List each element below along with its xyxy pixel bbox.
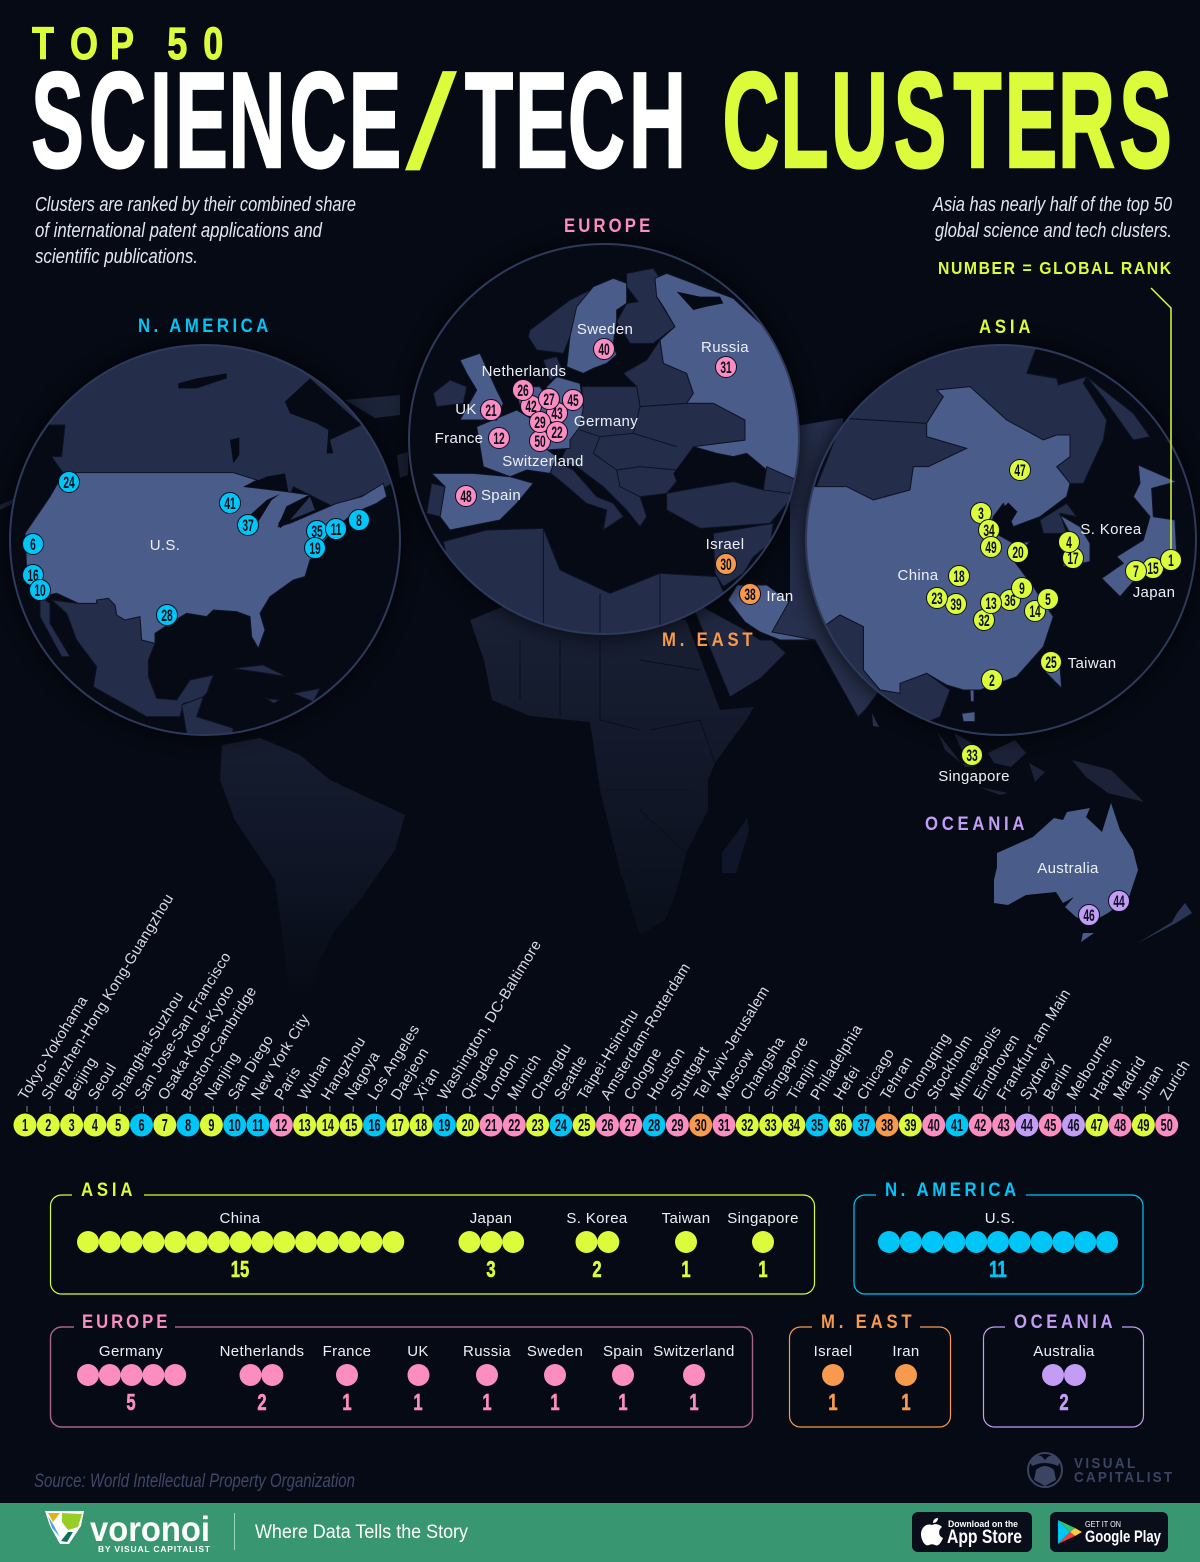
ranked list of clusters: Shenzhen-Hong Kong-Guangzhou	[38, 891, 177, 1103]
markers: Asia: 7	[1133, 563, 1139, 581]
ranked list of clusters: Seoul	[85, 1060, 120, 1103]
ranked list of clusters: Jinan	[1133, 1062, 1167, 1103]
ranked list of clusters: Wuhan	[295, 1053, 334, 1103]
ranked list of clusters: 9	[208, 1117, 214, 1136]
panel: Europe summary: France	[323, 1343, 371, 1360]
ranked list of clusters: 28	[648, 1117, 660, 1136]
ranked list of clusters: 31	[718, 1117, 730, 1136]
ranked list of clusters: Chicago	[854, 1045, 898, 1103]
panel: Asia summary	[50, 1179, 814, 1294]
panel: Middle East summary: 1	[901, 1390, 911, 1416]
ranked list of clusters: Daejeon	[388, 1045, 433, 1103]
country labels: UK	[455, 401, 477, 418]
markers: Europe and Middle East: 21	[485, 402, 497, 420]
ranked list of clusters: 37	[858, 1117, 870, 1136]
ranked list of clusters: Hangzhou	[318, 1034, 369, 1103]
ranked list of clusters: 3	[69, 1117, 75, 1136]
markers: North America: 24	[63, 474, 75, 492]
ranked list of clusters: Chongqing	[900, 1030, 954, 1103]
ranked list of clusters: Los Angeles	[364, 1022, 423, 1103]
markers: North America: 6	[30, 536, 36, 554]
panel: Oceania summary: OCEANIA	[1014, 1311, 1113, 1332]
ranked list of clusters: 41	[951, 1117, 963, 1136]
ranked list of clusters: Qingdao	[458, 1044, 503, 1103]
markers: North America: 8	[356, 512, 362, 530]
ranked list of clusters: 8	[185, 1117, 191, 1136]
country labels: China	[898, 567, 939, 584]
markers: Europe and Middle East: 48	[460, 488, 472, 506]
ranked list of clusters: San Diego	[225, 1032, 277, 1103]
markers: Europe and Middle East: 43	[551, 405, 563, 423]
panel: North America summary	[854, 1179, 1143, 1294]
panel: Asia summary: China	[220, 1210, 261, 1227]
ranked list of clusters: 26	[601, 1117, 614, 1136]
panel: Oceania summary: Australia	[1033, 1343, 1095, 1360]
Google Play button	[1050, 1512, 1168, 1552]
markers: Europe and Middle East: 29	[534, 414, 546, 432]
footer band	[0, 1503, 1200, 1562]
logo: Visual Capitalist: CAPITALIST	[1074, 1469, 1172, 1486]
panel: Middle East summary	[790, 1311, 950, 1427]
ranked list of clusters: 16	[368, 1117, 381, 1136]
ranked list of clusters: 27	[625, 1117, 637, 1136]
markers: Asia: 32	[978, 612, 990, 630]
ranked list of clusters: 17	[392, 1117, 404, 1136]
markers: North America: 19	[309, 540, 321, 558]
panel: Europe summary: 1	[342, 1390, 352, 1416]
country labels: Taiwan	[1068, 655, 1116, 672]
panel: Middle East summary: M. EAST	[821, 1311, 912, 1332]
markers: Europe and Middle East	[456, 338, 760, 604]
markers: Europe and Middle East: 50	[534, 433, 546, 451]
region heading: North America: N. AMERICA	[138, 315, 268, 336]
Australia	[994, 803, 1138, 923]
panel: Europe summary: 2	[257, 1390, 267, 1416]
ranked list of clusters: Melbourne	[1063, 1031, 1116, 1103]
ranked list of clusters: Nanjing	[201, 1049, 243, 1103]
country labels: Israel	[706, 536, 744, 553]
intro text: of international patent applications and	[35, 220, 323, 242]
ranked list of clusters: 46	[1067, 1117, 1080, 1136]
ranked list of clusters: 21	[485, 1117, 497, 1136]
region heading: Asia: ASIA	[979, 316, 1031, 337]
ranked list of clusters: 13	[299, 1117, 311, 1136]
ranked list of clusters: 34	[788, 1117, 801, 1136]
panel: Europe summary: Spain	[603, 1343, 643, 1360]
markers: North America: 35	[311, 523, 323, 541]
ranked list of clusters: 11	[252, 1117, 264, 1136]
panel: Middle East summary: 1	[828, 1390, 838, 1416]
markers: Asia	[926, 460, 1182, 766]
panel: North America summary: U.S.	[985, 1210, 1015, 1227]
ranked list of clusters: Eindhoven	[970, 1031, 1023, 1103]
panel: Europe summary: 1	[689, 1390, 699, 1416]
ranked list of clusters: Changsha	[737, 1034, 789, 1103]
ranked list of clusters: Stuttgart	[667, 1043, 713, 1103]
markers: Asia: 17	[1067, 550, 1079, 568]
logo: Voronoi: BY VISUAL CAPITALIST	[98, 1544, 211, 1554]
ranked list of clusters: 14	[322, 1117, 335, 1136]
logo: Voronoi: voronoi	[90, 1510, 210, 1549]
markers: Oceania: 44	[1113, 893, 1125, 911]
ranked list of clusters: 10	[229, 1117, 241, 1136]
asia note text	[932, 194, 1172, 242]
ranked list of clusters: Berlin	[1040, 1060, 1076, 1103]
markers: Europe and Middle East: 27	[543, 391, 555, 409]
markers: Europe and Middle East: 30	[720, 556, 732, 574]
ranked list of clusters: 22	[508, 1117, 520, 1136]
markers: Oceania	[1078, 890, 1130, 926]
panel: Europe summary: 1	[482, 1390, 492, 1416]
ranked list of clusters: 29	[671, 1117, 683, 1136]
markers: Europe and Middle East: 42	[525, 398, 537, 416]
logo: Visual Capitalist: VISUAL	[1074, 1455, 1135, 1472]
intro text	[35, 194, 356, 268]
markers: North America: 10	[34, 582, 46, 600]
ranked list of clusters: 45	[1044, 1117, 1056, 1136]
ranked list of clusters: 33	[765, 1117, 777, 1136]
ranked list of clusters: Boston-Cambridge	[178, 983, 260, 1103]
ranked list of clusters: Tehran	[877, 1054, 916, 1103]
markers: North America: 37	[242, 517, 254, 535]
logo: Voronoi	[45, 1510, 211, 1554]
arrow: rank pointer	[1151, 288, 1171, 552]
ranked list of clusters: 12	[275, 1117, 287, 1136]
logo: Visual Capitalist	[1028, 1453, 1172, 1487]
markers: Asia: 2	[989, 672, 995, 690]
country labels: Spain	[481, 487, 521, 504]
intro text: scientific publications.	[35, 246, 198, 268]
panel: Europe globe	[404, 239, 804, 640]
ranked list of clusters: 2	[45, 1117, 51, 1136]
panel: Asia summary: S. Korea	[566, 1210, 628, 1227]
panel: Asia summary: 15	[231, 1257, 249, 1283]
ranked list of clusters: Osaka-Kobe-Kyoto	[155, 982, 238, 1103]
markers: Asia: 36	[1004, 592, 1016, 610]
panel: Europe summary: Netherlands	[220, 1343, 304, 1360]
ranked list of clusters	[14, 891, 1194, 1136]
panel: Asia summary: 2	[592, 1257, 602, 1283]
ranked list of clusters: Paris	[271, 1064, 304, 1103]
panel: Europe summary	[50, 1311, 752, 1427]
ranked list of clusters: 5	[115, 1117, 121, 1136]
ranked list of clusters: 30	[695, 1117, 707, 1136]
ranked list of clusters: Zurich	[1157, 1057, 1194, 1103]
ranked list of clusters: 44	[1021, 1117, 1034, 1136]
ranked list of clusters: 43	[998, 1117, 1010, 1136]
ranked list of clusters: Washington, DC-Baltimore	[434, 937, 545, 1103]
markers: Asia: 23	[931, 590, 943, 608]
markers: Asia: 20	[1012, 544, 1024, 562]
ranked list of clusters: 18	[415, 1117, 427, 1136]
ranked list of clusters: Cologne	[621, 1045, 666, 1103]
panel: Europe summary: 1	[413, 1390, 423, 1416]
title: science/tech clusters: CLUSTERS	[723, 43, 1172, 196]
panel: Europe summary: 1	[618, 1390, 628, 1416]
country labels: Sweden	[577, 321, 633, 338]
markers: Oceania: 46	[1083, 907, 1095, 925]
country labels: Netherlands	[482, 363, 566, 380]
ranked list of clusters: 19	[438, 1117, 450, 1136]
ranked list of clusters: 15	[345, 1117, 357, 1136]
panel: Asia summary: 1	[681, 1257, 691, 1283]
ranked list of clusters: San Jose-San Francisco	[131, 949, 235, 1103]
App Store button: App Store	[947, 1527, 1022, 1548]
ranked list of clusters: Harbin	[1087, 1055, 1125, 1103]
ranked list of clusters: Minneapolis	[947, 1023, 1005, 1103]
panel: Asia summary: Japan	[470, 1210, 512, 1227]
ranked list of clusters: Amsterdam-Rotterdam	[597, 960, 694, 1103]
markers: Europe and Middle East: 31	[720, 359, 732, 377]
markers: Asia: 49	[985, 539, 997, 557]
markers: Asia: 39	[950, 596, 962, 614]
markers: North America: 28	[161, 607, 173, 625]
App Store button	[912, 1512, 1032, 1552]
ranked list of clusters: 32	[741, 1117, 753, 1136]
ranked list of clusters: Tel Aviv-Jerusalem	[691, 983, 773, 1103]
Google Play button: Google Play	[1085, 1527, 1161, 1546]
ranked list of clusters: 36	[834, 1117, 847, 1136]
panel: Asia globe	[800, 340, 1200, 740]
ranked list of clusters: 47	[1091, 1117, 1103, 1136]
title: science/tech clusters: TECH	[465, 43, 686, 196]
markers: Asia: 3	[978, 505, 984, 523]
title: science/tech clusters: SCIENCE	[31, 43, 401, 196]
ranked list of clusters: Stockholm	[924, 1032, 976, 1103]
panel: Europe summary: Switzerland	[653, 1343, 735, 1360]
title: science/tech clusters	[31, 43, 1172, 198]
ranked list of clusters: 23	[532, 1117, 544, 1136]
ranked list of clusters: 42	[974, 1117, 986, 1136]
country labels: Singapore	[938, 768, 1010, 785]
panel: Oceania summary: 2	[1059, 1390, 1069, 1416]
ranked list of clusters: Tokyo-Yokohama	[15, 993, 92, 1103]
ranked list of clusters: London	[481, 1050, 523, 1103]
markers: Asia: 4	[1066, 534, 1072, 552]
markers: North America	[22, 472, 370, 626]
markers: North America: 41	[224, 495, 236, 513]
ranked list of clusters: 4	[92, 1117, 99, 1136]
ranked list of clusters: Tianjin	[784, 1055, 822, 1103]
intro text: Clusters are ranked by their combined share	[35, 194, 356, 216]
ranked list of clusters: 35	[811, 1117, 823, 1136]
country labels: Australia	[1037, 860, 1099, 877]
world map background	[0, 395, 1192, 1000]
ranked list of clusters: Houston	[644, 1045, 689, 1103]
panel: Asia summary: Taiwan	[662, 1210, 710, 1227]
markers: Asia: 9	[1019, 580, 1025, 598]
country labels: S. Korea	[1080, 521, 1142, 538]
ranked list of clusters: Moscow	[714, 1046, 758, 1103]
markers: Asia: 14	[1029, 603, 1041, 621]
panel: North America globe	[0, 340, 420, 740]
country labels: Switzerland	[502, 453, 584, 470]
panel: Middle East summary: Israel	[814, 1343, 852, 1360]
panel: Middle East summary: Iran	[892, 1343, 920, 1360]
markers: Europe and Middle East: 26	[517, 382, 529, 400]
ranked list of clusters: Singapore	[761, 1034, 812, 1103]
markers: Asia: 34	[983, 522, 995, 540]
ranked list of clusters: 24	[555, 1117, 568, 1136]
ranked list of clusters: 7	[162, 1117, 168, 1136]
ranked list of clusters: 50	[1161, 1117, 1173, 1136]
panel: Europe summary: UK	[407, 1343, 429, 1360]
ranked list of clusters: Sydney	[1017, 1050, 1058, 1103]
legend: number = global rank: NUMBER = GLOBAL RANK	[938, 258, 1171, 278]
panel: Europe summary: EUROPE	[82, 1311, 167, 1332]
ranked list of clusters: Seattle	[551, 1053, 591, 1103]
panel: Europe summary: Russia	[463, 1343, 511, 1360]
ranked list of clusters: Shanghai-Suzhou	[108, 989, 187, 1103]
panel: Europe summary: 1	[550, 1390, 560, 1416]
panel: Asia summary: 1	[758, 1257, 768, 1283]
markers: Europe and Middle East: 40	[598, 341, 610, 359]
title: top 50: TOP 50	[32, 18, 223, 69]
panel: Europe summary: 5	[126, 1390, 136, 1416]
panel: North America summary: N. AMERICA	[885, 1179, 1016, 1200]
ranked list of clusters: 20	[462, 1117, 474, 1136]
panel: North America summary: 11	[989, 1257, 1007, 1283]
ranked list of clusters: Taipei-Hsinchu	[574, 1007, 642, 1103]
panel: Oceania summary	[984, 1311, 1144, 1427]
ranked list of clusters: 40	[928, 1117, 940, 1136]
ranked list of clusters: 25	[578, 1117, 590, 1136]
ranked list of clusters: Philadelphia	[807, 1021, 866, 1103]
panel: Europe summary: Germany	[99, 1343, 163, 1360]
ranked list of clusters: Xi'an	[411, 1065, 443, 1103]
markers: Europe and Middle East: 38	[744, 586, 756, 604]
markers: Asia: 15	[1147, 560, 1159, 578]
ranked list of clusters: Hefei	[830, 1063, 864, 1103]
country labels	[150, 321, 1175, 877]
ranked list of clusters: Nagoya	[341, 1048, 384, 1103]
country labels: Iran	[766, 588, 794, 605]
ranked list of clusters: Frankfurt am Main	[994, 986, 1074, 1103]
ranked list of clusters: Chengdu	[528, 1040, 575, 1103]
ranked list of clusters: 39	[904, 1117, 916, 1136]
Google Play button: GET IT ON	[1085, 1520, 1121, 1529]
markers: Asia: 5	[1045, 591, 1051, 609]
markers: North America: 16	[27, 567, 39, 585]
markers: Asia: 1	[1168, 552, 1174, 570]
source: Source: World Intellectual Property Organization	[34, 1471, 355, 1492]
markers: Europe and Middle East: 22	[551, 424, 563, 442]
markers: Asia: 25	[1045, 654, 1057, 672]
markers: Europe and Middle East: 45	[567, 392, 579, 410]
ranked list of clusters: Madrid	[1110, 1054, 1149, 1103]
ranked list of clusters: New York City	[248, 1011, 313, 1103]
tagline: Where Data Tells the Story	[255, 1522, 468, 1543]
ranked list of clusters: 1	[22, 1117, 28, 1136]
ranked list of clusters: 38	[881, 1117, 893, 1136]
panel: Asia summary: ASIA	[81, 1179, 133, 1200]
region heading: Oceania: OCEANIA	[925, 813, 1025, 834]
markers: Asia: 33	[966, 747, 978, 765]
ranked list of clusters: 49	[1137, 1117, 1149, 1136]
panel: Asia summary: Singapore	[727, 1210, 799, 1227]
ranked list of clusters: Munich	[504, 1051, 545, 1103]
markers: Asia: 47	[1014, 462, 1026, 480]
ranked list of clusters: 6	[138, 1117, 145, 1136]
region heading: Middle East: M. EAST	[662, 629, 753, 650]
App Store button: Download on the	[948, 1519, 1018, 1529]
panel: Europe summary: Sweden	[527, 1343, 583, 1360]
country labels: U.S.	[150, 537, 180, 554]
country labels: Russia	[701, 339, 749, 356]
markers: Europe and Middle East: 12	[493, 430, 505, 448]
panel: Asia summary: 3	[486, 1257, 496, 1283]
markers: North America: 11	[331, 521, 342, 539]
country labels: Germany	[574, 413, 638, 430]
country labels: France	[435, 430, 483, 447]
markers: Asia: 18	[953, 568, 965, 586]
country labels: Japan	[1133, 584, 1175, 601]
title: science/tech clusters: /	[405, 47, 458, 198]
markers: Asia: 13	[985, 595, 997, 613]
region heading: Europe: EUROPE	[564, 215, 650, 236]
ranked list of clusters: Beijing	[62, 1054, 101, 1103]
ranked list of clusters: 48	[1114, 1117, 1126, 1136]
